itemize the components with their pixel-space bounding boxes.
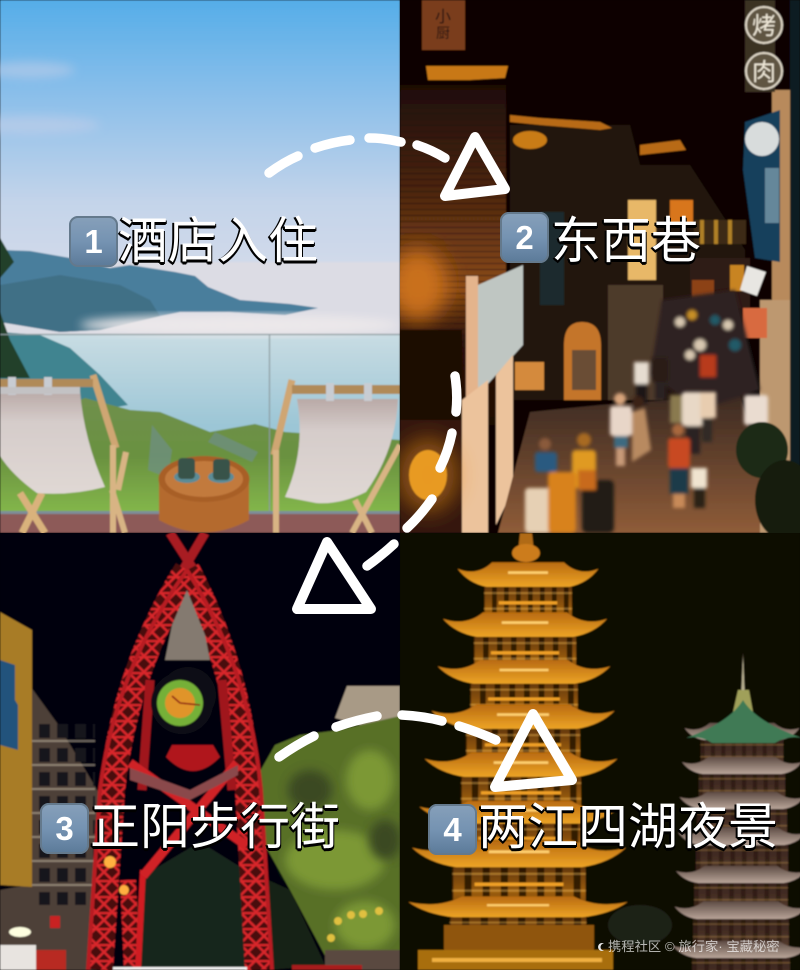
terraced hillside (0, 398, 400, 515)
watermark: 携程社区 © 旅行家· 宝藏秘密 (608, 939, 780, 954)
clock tower frame (88, 533, 272, 970)
white hanging lamp (740, 266, 766, 296)
blue coconut sign (743, 110, 780, 262)
dark fish sign (540, 212, 564, 305)
heading: Zhengyang pedestrian street: 正阳步行街 (90, 799, 340, 855)
clock (151, 667, 216, 734)
arrow: dashed route from panel 3 to panel 4 (279, 714, 572, 787)
bright billboard strip (466, 276, 478, 401)
far mountain shade (0, 275, 160, 332)
tall yellow sign (628, 200, 656, 280)
keycap 3 (40, 803, 89, 854)
keycap 2: 2 (515, 219, 534, 256)
panel: Dongxi alley night street photo (388, 0, 800, 540)
right deck chair (274, 380, 400, 533)
terrace details (148, 425, 258, 478)
low cloud band (80, 315, 400, 335)
night sky (400, 0, 800, 533)
left street buildings (0, 683, 103, 970)
cloud sea (0, 262, 400, 337)
white base bar (113, 967, 247, 970)
lower building right (325, 950, 400, 970)
alley street (498, 395, 780, 533)
middle brick buildings (510, 125, 745, 400)
shop front (690, 258, 750, 308)
panel: two rivers four lakes pagoda night photo (400, 533, 800, 970)
trees at pagoda base (608, 905, 672, 945)
yellow lanterns (327, 907, 383, 942)
arrow: dashed route from panel 2 to panel 3 (297, 376, 457, 609)
sign: xiaochu (422, 0, 465, 50)
red shop awning (743, 308, 767, 338)
shop lights (0, 916, 66, 970)
keycap 4: 4 (443, 811, 462, 848)
upper eave lights (426, 66, 508, 80)
heading: two rivers four lakes night view: 两江四湖夜景 (478, 799, 778, 855)
panels between cross (130, 765, 238, 800)
near left ridge (0, 332, 128, 408)
round BBQ signs (745, 0, 782, 92)
glass railing lines (0, 334, 400, 512)
brick glow (388, 249, 448, 321)
sign: xiaochu: 小 (435, 8, 451, 26)
lit brick wall (608, 285, 663, 400)
street tree mass (255, 715, 400, 970)
golden pagoda (408, 533, 628, 970)
lit shop panels (462, 355, 513, 533)
left deck chair (0, 375, 126, 533)
heading: hotel check-in: 酒店入住 (118, 213, 318, 269)
deck (0, 513, 400, 533)
gold building sign (0, 612, 32, 887)
lit roof edges (510, 115, 686, 155)
glowing gable (513, 131, 547, 149)
deck rail (0, 511, 400, 514)
dark side wall (400, 330, 464, 387)
keycap 4 (428, 804, 477, 855)
distant crowd (650, 290, 760, 410)
shop sign orange (515, 362, 544, 390)
orange sign (670, 200, 693, 226)
keycap 2 (500, 212, 549, 263)
night sky (0, 533, 400, 970)
tower central panels (165, 590, 210, 660)
heading: Dongxi alley: 东西巷 (551, 213, 701, 269)
keycap 1: 1 (84, 223, 103, 260)
left brick tower (400, 85, 506, 425)
panel: Zhengyang pedestrian street clock tower photo (0, 533, 401, 970)
far mountains (0, 250, 318, 332)
round BBQ signs: 肉 (752, 59, 776, 86)
bushes right (736, 422, 788, 478)
keycap 3: 3 (55, 810, 74, 847)
panel: mountain terrace hotel photo (0, 0, 400, 533)
dark foliage beside tower (268, 880, 325, 970)
distant building (335, 686, 400, 725)
pedestrians (525, 358, 768, 533)
sky (0, 0, 400, 290)
red disc (166, 745, 220, 771)
right wall (772, 90, 790, 310)
dark foliage accents (288, 770, 401, 860)
blue banner (0, 660, 18, 750)
left trees (0, 238, 30, 378)
silver pagoda (673, 653, 800, 970)
tree highlights (285, 750, 395, 949)
arrow: dashed route from panel 1 to panel 2 (269, 137, 505, 196)
sign: xiaochu: 厨 (436, 25, 450, 41)
arched doorway (564, 322, 601, 400)
high clouds (0, 62, 100, 134)
lower lamps (104, 856, 129, 895)
dark backdrop (400, 533, 800, 970)
white billboard (478, 265, 523, 395)
inner tower foliage (125, 842, 262, 970)
round BBQ signs: 烤 (752, 13, 776, 40)
keycap 1 (69, 216, 118, 267)
glass view (42, 335, 400, 442)
round wooden table (158, 456, 250, 532)
window strip (694, 220, 746, 244)
icon: watermark logo (598, 943, 604, 951)
wall lamp (409, 450, 447, 500)
